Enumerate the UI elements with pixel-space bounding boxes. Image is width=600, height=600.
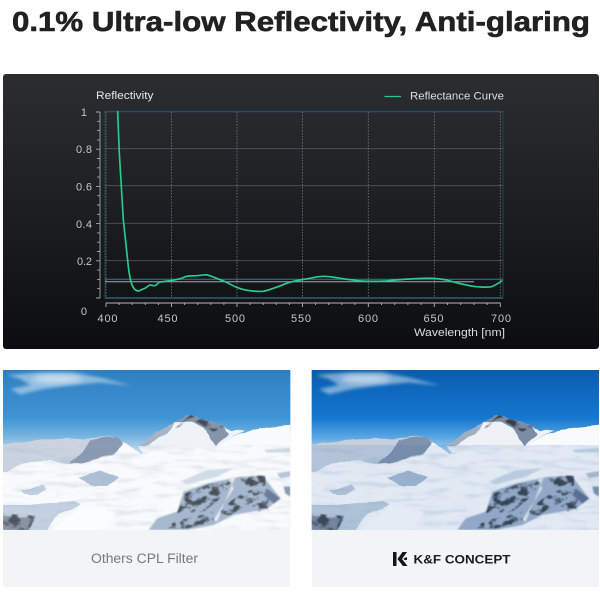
y axis bbox=[96, 112, 100, 298]
caption: Others CPL Filter bbox=[91, 551, 199, 566]
y axis labels: 0.6 bbox=[76, 182, 92, 194]
panel: others CPL filter bbox=[0, 370, 294, 587]
x axis title: Wavelength [nm] bbox=[414, 327, 505, 339]
x axis labels: 500 bbox=[225, 313, 245, 325]
panel: reflectivity chart bbox=[3, 74, 599, 349]
icon: logo mark bbox=[393, 552, 408, 566]
title: 0.1% Ultra-low Reflectivity, Anti-glaring bbox=[12, 6, 590, 37]
x axis labels: 650 bbox=[424, 313, 444, 325]
photo: washed-out mountain bbox=[0, 370, 294, 533]
y axis labels: 0 bbox=[81, 306, 87, 318]
y axis labels: 0.2 bbox=[77, 256, 92, 268]
photo: high-contrast mountain bbox=[309, 370, 600, 533]
x axis labels: 400 bbox=[98, 313, 118, 325]
y axis labels: 0.8 bbox=[76, 144, 92, 156]
wordmark: K&F CONCEPT bbox=[414, 552, 511, 566]
x axis labels: 700 bbox=[491, 313, 511, 325]
y axis labels bbox=[76, 107, 92, 318]
y axis labels: 0.4 bbox=[76, 219, 92, 231]
x axis labels: 600 bbox=[358, 313, 378, 325]
x axis bbox=[106, 303, 500, 307]
y axis labels: 1 bbox=[81, 107, 87, 119]
y axis title: Reflectivity bbox=[96, 90, 154, 102]
x axis labels: 450 bbox=[158, 313, 178, 325]
reflectance curve bbox=[118, 112, 502, 291]
K&F Concept logo bbox=[393, 552, 511, 566]
legend: Reflectance Curve bbox=[410, 90, 504, 102]
panel: K&F Concept filter bbox=[309, 370, 600, 587]
plot frame bbox=[105, 112, 503, 298]
x axis labels bbox=[98, 313, 511, 325]
x axis labels: 550 bbox=[291, 313, 311, 325]
